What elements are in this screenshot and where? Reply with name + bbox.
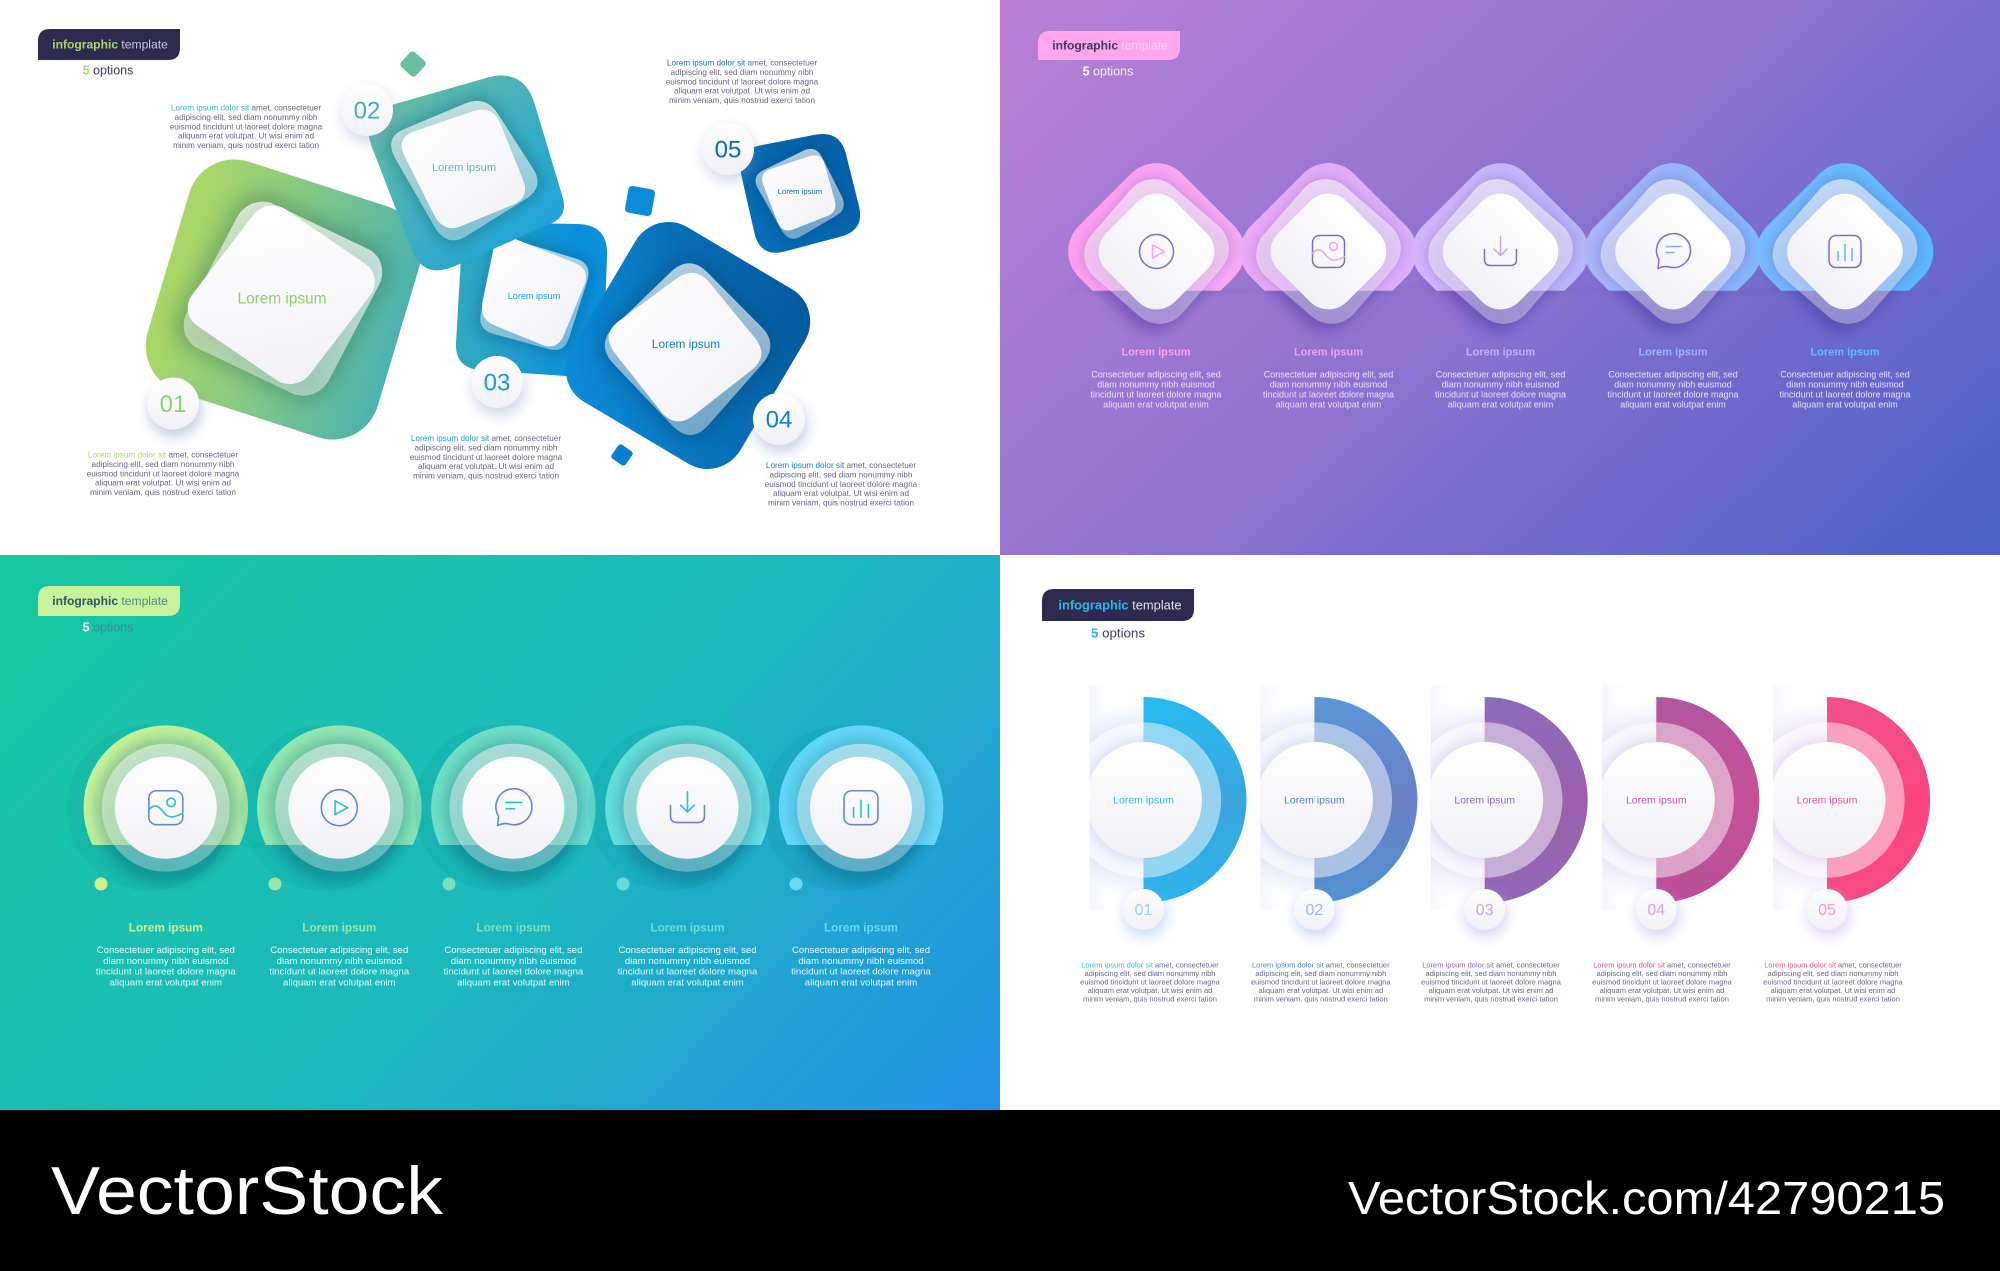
caption 1: Consectetuer adipiscing elit, sed [1091,370,1221,380]
caption 5: Lorem ipsum [824,920,898,934]
text block 03: Lorem ipsum dolor sit amet, consectetuer [1422,961,1560,970]
caption 1: diam nonummy nibh euismod [103,956,228,967]
caption 5: Consectetuer adipiscing elit, sed [792,945,930,956]
panel: diamonds on purple [1000,0,2000,555]
diamond item 2 [1240,163,1414,335]
text block 04: aliquam erat volutpat. Ut wisi enim ad [773,489,909,498]
caption 1: diam nonummy nibh euismod [1097,380,1215,390]
caption 3: diam nonummy nibh euismod [451,956,576,967]
caption 4 [618,920,758,988]
caption 3: Lorem ipsum [476,920,550,934]
caption 1: aliquam erat volutpat enim [110,977,222,988]
caption 3: aliquam erat volutpat enim [457,977,570,988]
caption 5: diam nonummy nibh euismod [798,956,924,967]
icon: download [671,792,704,823]
caption 4: aliquam erat volutpat enim [631,977,744,988]
caption 5 [1779,346,1911,410]
text block 05: aliquam erat volutpat. Ut wisi enim ad [674,87,810,96]
text block 01: minim veniam, quis nostrud exerci tation [90,488,236,497]
shape 05: Lorem ipsum [778,187,822,196]
text block 01: adipiscing elit, sed diam nonummy nibh [92,460,235,469]
header pill: infographic template [1052,38,1168,52]
number 04 [1636,889,1680,937]
shape 03: Lorem ipsum [508,291,560,301]
caption 3 [444,920,584,988]
number 01: 01 [160,391,186,418]
text block 05: Lorem ipsum dolor sit amet, consectetuer [667,58,817,68]
number 04: 04 [1647,902,1665,919]
text block 03: euismod tincidunt ut laoreet dolore magna [410,453,563,462]
number 04 [753,393,808,453]
caption 4: Consectetuer adipiscing elit, sed [618,945,757,956]
caption 4: diam nonummy nibh euismod [625,956,750,967]
half disc 2 [1260,685,1418,910]
text block 04: aliquam erat volutpat. Ut wisi enim ad [1600,986,1724,995]
footer bar [0,1110,2000,1271]
shape 05 [740,134,860,253]
caption 1: Lorem ipsum [129,920,203,934]
caption 5: Consectetuer adipiscing elit, sed [1780,370,1910,380]
number 01 [1123,889,1167,937]
text block 03: Lorem ipsum dolor sit amet, consectetuer [411,434,561,443]
text block 02: minim veniam, quis nostrud exerci tation [1254,995,1388,1004]
dot 3 [442,878,456,890]
caption 5: tincidunt ut laoreet dolore magna [791,967,932,978]
decorative small blue diamond [610,443,634,467]
half disc 1: Lorem ipsum [1113,795,1174,807]
dot 4 [616,878,630,890]
text block 01: minim veniam, quis nostrud exerci tation [1083,995,1217,1004]
number 03 [471,356,526,416]
text block 02: adipiscing elit, sed diam nonummy nibh [175,113,318,122]
caption 3: aliquam erat volutpat enim [1448,400,1553,410]
caption 4: Lorem ipsum [1638,346,1708,358]
text block 04: euismod tincidunt ut laoreet dolore magna [1592,978,1733,987]
caption 5: Lorem ipsum [1810,346,1880,358]
caption 2: aliquam erat volutpat enim [283,977,396,988]
caption 2: aliquam erat volutpat enim [1276,400,1381,410]
caption 5: aliquam erat volutpat enim [805,977,917,988]
shape 01: Lorem ipsum [238,290,326,308]
shape 02 [369,76,564,270]
text block 05: euismod tincidunt ut laoreet dolore magna [1763,978,1904,987]
half disc 5: Lorem ipsum [1797,795,1858,807]
text block 01: aliquam erat volutpat. Ut wisi enim ad [95,479,231,488]
shape 03 [456,222,607,378]
shape 01 [134,147,433,452]
number 02 [341,84,396,143]
text block 02: minim veniam, quis nostrud exerci tation [173,141,319,150]
caption 4: aliquam erat volutpat enim [1620,400,1726,410]
icon: image [1312,236,1344,268]
dot 1 [94,878,108,890]
text block 02: aliquam erat volutpat. Ut wisi enim ad [178,132,314,141]
number 01 [147,378,202,437]
half disc 5 [1773,685,1930,910]
caption 2: Consectetuer adipiscing elit, sed [270,945,408,956]
footer logo: VectorStock [51,1153,444,1229]
text block 04: euismod tincidunt ut laoreet dolore magna [765,480,918,489]
diamond item 5 [1757,163,1934,334]
text block 01: euismod tincidunt ut laoreet dolore magna [87,469,240,478]
text block 01: Lorem ipsum dolor sit amet, consectetuer [1081,961,1219,970]
header pill [38,586,180,616]
half disc 4 [1602,686,1760,908]
caption 3: tincidunt ut laoreet dolore magna [1435,390,1566,400]
caption 1 [1090,346,1222,410]
caption 3: Lorem ipsum [1466,346,1535,358]
header pill [1042,589,1194,621]
half disc 3: Lorem ipsum [1454,795,1515,807]
shape 04: Lorem ipsum [652,337,720,351]
text block 02: adipiscing elit, sed diam nonummy nibh [1255,969,1386,978]
options caption: 5 options [83,64,133,78]
text block 05: adipiscing elit, sed diam nonummy nibh [1768,969,1898,978]
icon: image [149,791,183,825]
number 03: 03 [484,370,510,396]
text block 02: Lorem ipsum dolor sit amet, consectetuer [1252,961,1390,970]
text block 03: minim veniam, quis nostrud exerci tation [413,472,559,481]
caption 3: Consectetuer adipiscing elit, sed [1436,370,1565,380]
caption 3: diam nonummy nibh euismod [1442,380,1559,390]
number 02 [1294,889,1338,937]
caption 2: diam nonummy nibh euismod [277,956,402,967]
header pill: infographic template [1058,598,1182,612]
text block 04: Lorem ipsum dolor sit amet, consectetuer [1593,961,1731,970]
icon: play [1140,234,1174,268]
text block 05: aliquam erat volutpat. Ut wisi enim ad [1771,986,1895,995]
icon: bar chart [1829,236,1861,268]
half disc 2: Lorem ipsum [1284,795,1345,807]
number 04: 04 [766,406,792,434]
caption 1: tincidunt ut laoreet dolore magna [1090,390,1222,400]
text block 02: euismod tincidunt ut laoreet dolore magna [1251,978,1391,987]
caption 1: tincidunt ut laoreet dolore magna [96,967,236,978]
text block 05: minim veniam, quis nostrud exerci tation [1766,995,1900,1004]
caption 4: Lorem ipsum [650,920,725,934]
number 02: 02 [1306,902,1323,919]
number 05: 05 [1818,902,1836,919]
caption 2 [1263,346,1394,410]
text block 04: adipiscing elit, sed diam nonummy nibh [770,470,913,479]
number 01: 01 [1135,902,1152,919]
caption 2 [269,920,410,988]
header pill [1038,31,1180,60]
circle item 2 [240,725,422,891]
text block 03: adipiscing elit, sed diam nonummy nibh [1426,969,1556,978]
text block 04: minim veniam, quis nostrud exerci tation [1595,995,1729,1004]
text block 03: adipiscing elit, sed diam nonummy nibh [415,443,558,452]
circle item 3 [414,725,596,891]
text block 01: Lorem ipsum dolor sit amet, consectetuer [88,450,238,460]
text block 05: Lorem ipsum dolor sit amet, consectetuer [1764,961,1902,970]
text block 01: euismod tincidunt ut laoreet dolore magna [1080,978,1221,987]
options caption: 5 options [1091,626,1145,640]
number 03: 03 [1476,902,1494,919]
shape 02: Lorem ipsum [432,162,496,174]
icon: play [321,790,357,826]
text block 02: aliquam erat volutpat. Ut wisi enim ad [1258,986,1383,995]
footer url: VectorStock.com/42790215 [1348,1172,1945,1224]
half disc 1 [1090,685,1246,910]
caption 4 [1607,346,1739,410]
panel: half discs on white [1042,589,1930,1003]
icon: download [1484,236,1516,266]
text block 03: minim veniam, quis nostrud exerci tation [1424,995,1558,1004]
caption 2: Lorem ipsum [1294,346,1363,358]
caption 4: Consectetuer adipiscing elit, sed [1608,370,1738,380]
text block 03: aliquam erat volutpat. Ut wisi enim ad [1429,986,1553,995]
panel: rounded squares [0,0,1000,555]
caption 4: diam nonummy nibh euismod [1614,380,1732,390]
decorative blue square [624,185,656,217]
half disc 4: Lorem ipsum [1626,795,1687,807]
circle item 1 [67,725,248,891]
text block 02: euismod tincidunt ut laoreet dolore magna [170,122,323,131]
header pill: infographic template [52,594,168,608]
circle item 4 [588,725,770,891]
number 05 [1806,889,1850,937]
options caption: 5 options [1083,64,1133,78]
icon: bar chart [844,791,878,825]
caption 5: diam nonummy nibh euismod [1786,380,1904,390]
text block 04: adipiscing elit, sed diam nonummy nibh [1597,969,1727,978]
number 05 [702,123,757,182]
shape 04 [552,208,824,483]
caption 3: Consectetuer adipiscing elit, sed [444,945,582,956]
caption 1: aliquam erat volutpat enim [1103,400,1209,410]
diamond item 3 [1414,163,1587,334]
caption 5: tincidunt ut laoreet dolore magna [1779,390,1911,400]
text block 01: adipiscing elit, sed diam nonummy nibh [1085,969,1215,978]
text block 04: minim veniam, quis nostrud exerci tation [768,499,914,508]
caption 1 [96,920,236,988]
icon: chat bubble [1656,234,1690,268]
text block 05: minim veniam, quis nostrud exerci tation [669,96,815,105]
decorative green diamond [399,50,427,78]
caption 5 [791,920,932,988]
caption 3 [1435,346,1566,410]
options caption: 5 options [83,620,133,634]
header pill [38,29,180,60]
caption 3: tincidunt ut laoreet dolore magna [444,967,584,978]
panel: circles on teal [0,555,1000,1110]
number 05: 05 [715,136,741,164]
text block 05: euismod tincidunt ut laoreet dolore magna [666,77,819,86]
caption 1: Consectetuer adipiscing elit, sed [97,945,235,956]
circle item 5 [762,725,943,891]
caption 4: tincidunt ut laoreet dolore magna [618,967,758,978]
caption 1: Lorem ipsum [1121,346,1191,358]
dot 2 [268,878,282,890]
caption 2: tincidunt ut laoreet dolore magna [1263,390,1394,400]
text block 02: Lorem ipsum dolor sit amet, consectetuer [171,104,321,112]
number 03 [1464,889,1508,937]
caption 2: Lorem ipsum [302,920,376,934]
diamond item 4 [1585,163,1759,334]
icon: chat bubble [496,789,532,826]
dot 5 [790,878,802,890]
text block 04: Lorem ipsum dolor sit amet, consectetuer [766,461,916,470]
text block 01: aliquam erat volutpat. Ut wisi enim ad [1088,986,1212,995]
diamond item 1 [1068,163,1242,336]
caption 2: Consectetuer adipiscing elit, sed [1264,370,1393,380]
number 02: 02 [354,98,380,124]
caption 2: diam nonummy nibh euismod [1270,380,1387,390]
caption 5: aliquam erat volutpat enim [1792,400,1898,410]
text block 03: euismod tincidunt ut laoreet dolore magna [1421,978,1562,987]
caption 4: tincidunt ut laoreet dolore magna [1607,390,1739,400]
header pill: infographic template [52,38,168,52]
text block 03: aliquam erat volutpat. Ut wisi enim ad [418,462,554,471]
half disc 3 [1430,685,1588,910]
text block 05: adipiscing elit, sed diam nonummy nibh [671,68,814,77]
caption 2: tincidunt ut laoreet dolore magna [269,967,410,978]
